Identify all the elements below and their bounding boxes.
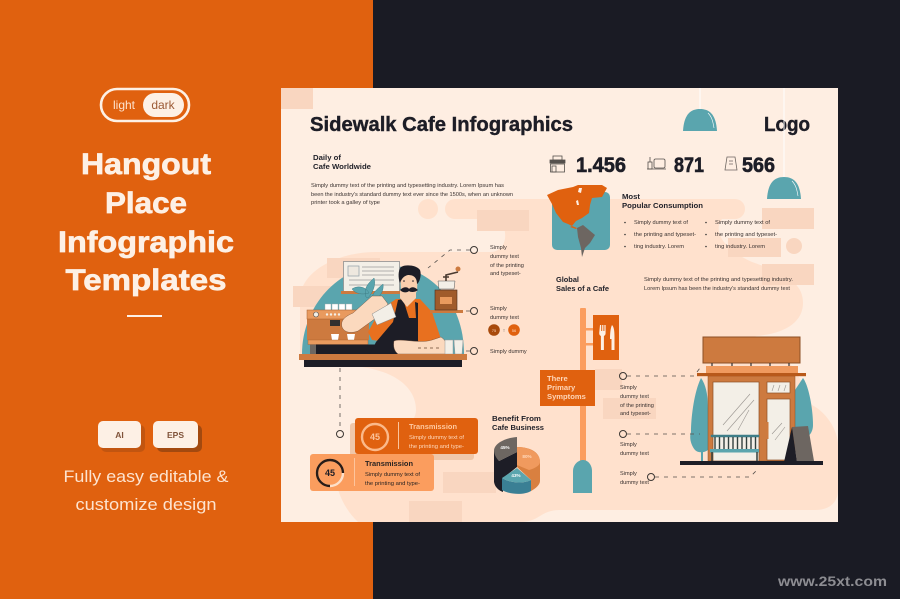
most popular consumption — [622, 192, 777, 250]
daily text block: Daily of — [313, 153, 341, 162]
main heading — [58, 148, 234, 297]
awning — [697, 366, 806, 376]
toggle: light / dark: light — [113, 98, 136, 112]
statistics — [550, 154, 775, 177]
badges: 56 — [512, 328, 517, 333]
card: transmission light — [310, 454, 434, 491]
3D pie chart: 43% — [511, 473, 521, 478]
stat: 871: 871 — [674, 154, 704, 177]
daily text block: Cafe Worldwide — [313, 162, 371, 171]
barista illustration — [299, 262, 467, 367]
box: there primary symptoms — [540, 370, 595, 406]
counter — [299, 354, 467, 360]
benefit from cafe business — [492, 414, 544, 494]
card: transmission dark: the printing and type- — [409, 444, 464, 450]
background blobs — [300, 199, 838, 522]
bullet list 2 — [705, 220, 777, 250]
badges — [488, 324, 520, 336]
icon: menu board — [725, 157, 737, 170]
coffee grinder — [430, 266, 463, 313]
bullet list 1 — [624, 220, 696, 250]
global sales — [556, 275, 793, 293]
lamp 2 — [767, 88, 801, 199]
teal backdrop — [302, 265, 464, 354]
main heading: Place — [105, 187, 187, 220]
storefront callouts: Simply — [620, 471, 637, 477]
icon: cafe building — [550, 156, 565, 172]
tagline — [64, 467, 229, 514]
barista callouts: of the printing — [490, 263, 524, 269]
shop sign — [703, 337, 800, 366]
card: transmission light: Simply dummy text of — [365, 472, 420, 478]
left orange panel — [0, 0, 373, 599]
icon: coffee machine — [647, 157, 666, 169]
barista callouts — [428, 245, 527, 355]
barista callouts: and typeset- — [490, 271, 521, 277]
main heading: Templates — [66, 264, 226, 297]
daily text block: been the industry's standard dummy text ever since the 1500s, when an unknown — [311, 192, 513, 198]
plant — [352, 278, 383, 301]
box: there primary symptoms: There — [547, 374, 568, 383]
benefit from cafe business: Benefit From — [492, 414, 541, 423]
format badges — [98, 421, 202, 452]
most popular consumption: Most — [622, 192, 640, 201]
format badges: EPS — [167, 430, 184, 440]
espresso machine — [307, 304, 410, 354]
daily text block — [311, 153, 513, 206]
card: transmission dark: 45 — [370, 432, 380, 442]
vertical connector — [336, 368, 344, 438]
3D pie chart: 80% — [522, 454, 532, 459]
trees — [690, 378, 813, 462]
stat: 1.456: 1.456 — [576, 154, 626, 177]
menu poster — [341, 262, 401, 294]
global sales: Lorem Ipsum has been the industry's standard dummy text — [644, 286, 790, 292]
storefront illustration — [680, 337, 823, 465]
barista callouts: Simply — [490, 306, 507, 312]
tagline: customize design — [76, 495, 216, 514]
3D pie chart — [494, 437, 540, 494]
map of the Americas — [547, 185, 610, 257]
storefront callouts: dummy text — [620, 451, 649, 457]
storefront callouts: dummy text — [620, 480, 649, 486]
box: there primary symptoms: Primary — [547, 383, 576, 392]
3D pie chart: 45% — [500, 445, 510, 450]
benefit from cafe business: Cafe Business — [492, 423, 544, 432]
ground — [680, 461, 823, 465]
card: transmission light: 45 — [325, 468, 335, 478]
format badges: AI — [115, 430, 124, 440]
card: transmission dark: Simply dummy text of — [409, 435, 464, 441]
main heading: Infographic — [58, 226, 234, 259]
barista callouts: dummy text — [490, 254, 519, 260]
toggle: light / dark: dark — [151, 98, 176, 112]
signpost — [573, 308, 619, 493]
lamp 1 — [683, 88, 717, 131]
storefront callouts: of the printing — [620, 403, 654, 409]
person — [342, 265, 448, 354]
shop building — [708, 376, 795, 461]
card: transmission dark: Transmission — [409, 422, 457, 431]
bench — [710, 435, 759, 461]
a-frame board — [784, 426, 814, 462]
decorative pale rectangles — [281, 88, 814, 522]
storefront callouts: dummy text — [620, 394, 649, 400]
card: transmission light: Transmission — [365, 459, 413, 468]
most popular consumption: Popular Consumption — [622, 201, 703, 210]
bullet list 1: Simply dummy text of — [634, 220, 688, 226]
bullet list 1: the printing and typeset- — [634, 232, 696, 238]
glasses — [445, 340, 463, 354]
global sales: Simply dummy text of the printing and typesetting industry. — [644, 277, 793, 283]
bullet list 1: ting industry. Lorem — [634, 244, 684, 250]
bullet list 2: the printing and typeset- — [715, 232, 777, 238]
storefront callouts: Simply — [620, 385, 637, 391]
global sales: Sales of a Cafe — [556, 284, 609, 293]
badges: 75 — [492, 328, 497, 333]
storefront callouts: and typeset- — [620, 411, 651, 417]
daily text block: Simply dummy text of the printing and typesetting industry. Lorem Ipsum has — [311, 183, 504, 189]
daily text block: printer took a galley of type — [311, 200, 380, 206]
infographic panel — [281, 88, 838, 522]
bullet list 2: ting industry. Lorem — [715, 244, 765, 250]
main heading: Hangout — [81, 148, 211, 181]
bullet list 2: Simply dummy text of — [715, 220, 770, 226]
box: there primary symptoms: Symptoms — [547, 392, 586, 401]
title: Sidewalk Cafe Infographics — [310, 114, 573, 136]
card: transmission light: the printing and type- — [365, 481, 420, 487]
watermark: www.25xt.com — [777, 573, 887, 589]
global sales: Global — [556, 275, 579, 284]
toggle: light / dark — [101, 89, 189, 121]
card: transmission dark — [350, 418, 478, 460]
stat: 566: 566 — [742, 154, 775, 177]
tagline: Fully easy editable & — [64, 467, 229, 486]
badges: ↑ — [503, 328, 505, 334]
barista callouts: Simply — [490, 245, 507, 251]
barista callouts: dummy text — [490, 315, 519, 321]
sign: fork and knife — [593, 315, 619, 360]
storefront callouts: Simply — [620, 442, 637, 448]
barista callouts: Simply dummy — [490, 349, 527, 355]
storefront callouts — [620, 368, 758, 486]
logo: Logo — [764, 114, 810, 136]
